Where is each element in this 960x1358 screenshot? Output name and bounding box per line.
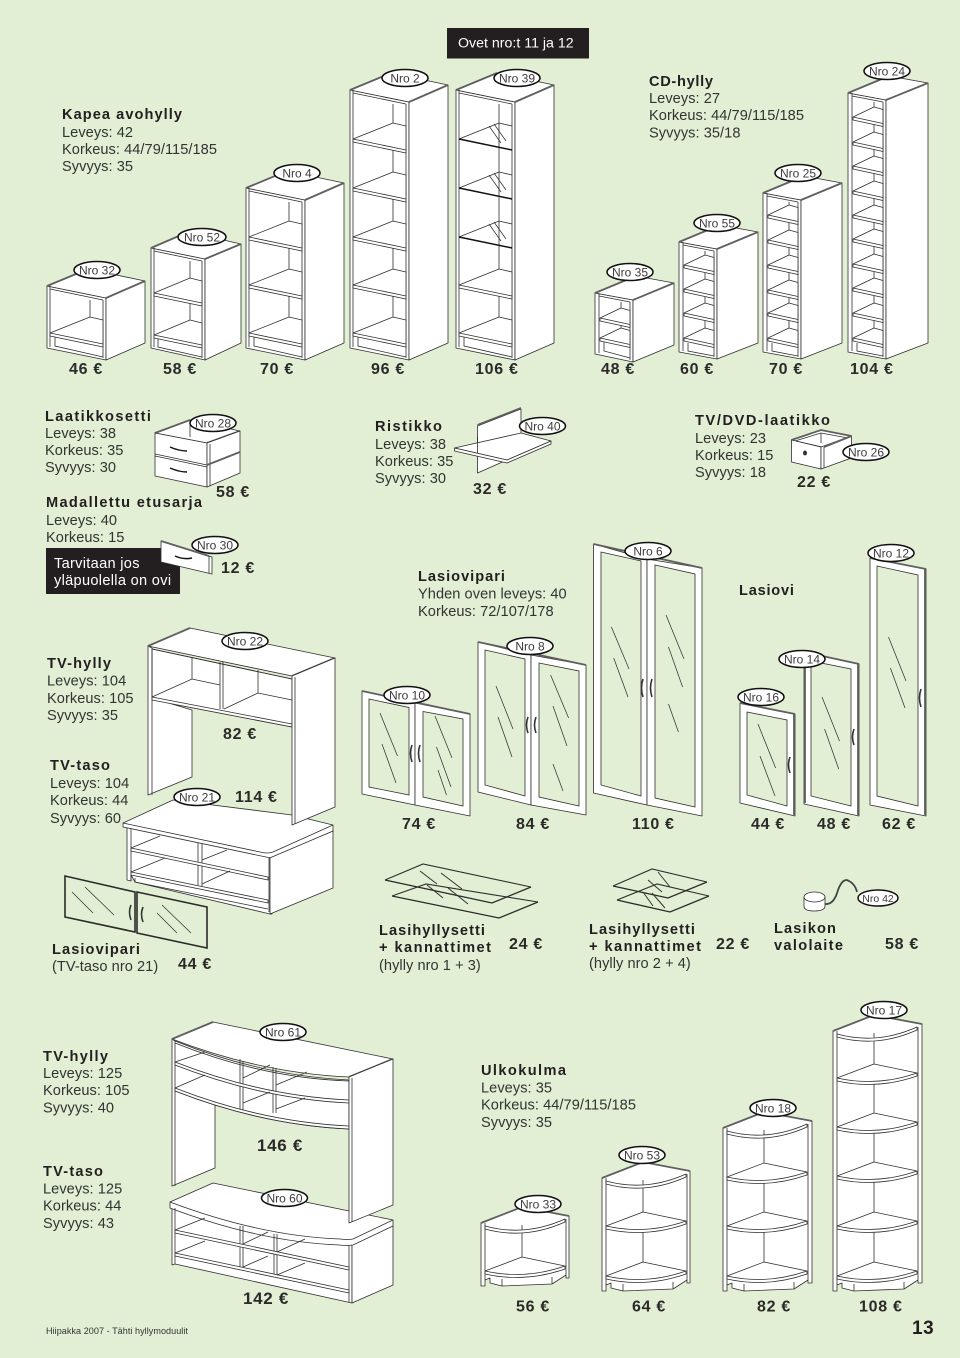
- labels: glass doors: Nro 10: [389, 688, 425, 702]
- text block: glass shelf set 1 + 3: (hylly nro 1 + 3): [379, 958, 481, 974]
- callout: glass doors note: [447, 28, 589, 58]
- glass door pair: Nro 6: [594, 544, 702, 816]
- corner shelf: Nro 18: [723, 1112, 812, 1291]
- prices: corner shelves: 56 €: [516, 1298, 550, 1316]
- labels and prices: TV set 125: Nro 61: [265, 1026, 301, 1040]
- text block: TV-hylly 104: Syvyys: 35: [47, 708, 118, 724]
- text block: glass shelf set 2 + 4: Lasihyllysetti: [589, 922, 695, 938]
- text block: Kapea avohylly: Syvyys: 35: [62, 159, 133, 175]
- text block: Lasiovipari TV-taso: [52, 942, 158, 975]
- text block: glass shelf set 2 + 4: + kannattimet: [589, 939, 701, 955]
- text block: Ulkokulma: Leveys: 35: [481, 1080, 552, 1096]
- labels: top row numbers: Nro 39: [499, 72, 535, 86]
- icon: glass light fitting with cable: [804, 880, 857, 911]
- labels: drawers: Nro 28: [195, 416, 231, 430]
- TV stand: Nro 21: [123, 800, 333, 914]
- text block: Ulkokulma: Syvyys: 35: [481, 1115, 552, 1131]
- labels: glass doors: Nro 8: [515, 640, 545, 654]
- TV shelf: Nro 61: [172, 1022, 393, 1223]
- labels: corner shelves: Nro 18: [755, 1102, 791, 1116]
- labels: glass doors: Nro 14: [784, 652, 820, 666]
- text block: TV-taso 104: Leveys: 104: [50, 776, 129, 792]
- prices: top row: 70 €: [260, 361, 294, 378]
- shelf: Nro 4: [246, 171, 344, 360]
- labels: top row numbers: Nro 52: [184, 230, 220, 244]
- text block: glass shelf set 1 + 3: + kannattimet: [379, 940, 491, 956]
- text block: CD-hylly: CD-hylly: [649, 74, 714, 90]
- text block: Ulkokulma: [481, 1063, 636, 1131]
- text block: TV/DVD-laatikko: Syvyys: 18: [695, 465, 766, 481]
- text block: Ulkokulma: Korkeus: 44/79/115/185: [481, 1098, 636, 1114]
- text block: CD-hylly: [649, 74, 804, 142]
- prices: top row: [69, 361, 894, 378]
- text block: TV-hylly 125: [43, 1049, 130, 1116]
- labels: top row numbers: Nro 4: [282, 166, 312, 180]
- text block: TV-taso 125: Leveys: 125: [43, 1182, 122, 1198]
- text block: Madallettu etusarja: Korkeus: 15: [46, 530, 124, 546]
- text block: TV-hylly 125: Syvyys: 40: [43, 1100, 114, 1116]
- text block: Madallettu etusarja: Leveys: 40: [46, 513, 117, 529]
- text block: CD-hylly: Syvyys: 35/18: [649, 126, 740, 142]
- text block: Kapea avohylly: Kapea avohylly: [62, 107, 183, 123]
- text block: TV-hylly 104: Leveys: 104: [47, 674, 126, 690]
- prices: top row: 48 €: [601, 361, 635, 378]
- labels: top row numbers: Nro 2: [390, 72, 420, 86]
- drawer: Nro 26: Nro 26: [848, 446, 884, 460]
- callout: needed if door above: [46, 548, 180, 594]
- prices: corner shelves: 64 €: [632, 1298, 666, 1316]
- grid divider: Nro 40: [454, 408, 566, 473]
- prices: corner shelves: [516, 1298, 903, 1316]
- text block: Lasiovi: Lasiovi: [739, 583, 794, 599]
- text block: Laatikkosetti: [45, 409, 151, 476]
- text block: TV-hylly 104: [47, 656, 134, 724]
- text block: glass shelf set 1 + 3: [379, 923, 491, 974]
- prices: glass doors: 74 €: [402, 816, 436, 833]
- prices: glass doors: [402, 816, 916, 833]
- prices: glass doors: 84 €: [516, 816, 550, 833]
- callout: needed if door above: yläpuolella on ovi: [54, 573, 171, 589]
- text block: Laatikkosetti: Syvyys: 30: [45, 460, 116, 476]
- text block: TV/DVD-laatikko: [695, 413, 830, 481]
- text block: Madallettu etusarja: Madallettu etusarja: [46, 495, 203, 511]
- shelf: Nro 25: [763, 176, 842, 359]
- text block: Lasiovipari: Lasiovipari: [418, 569, 505, 585]
- text block: TV-hylly 125: Korkeus: 105: [43, 1083, 130, 1099]
- text block: CD-hylly: Korkeus: 44/79/115/185: [649, 108, 804, 124]
- labels and prices: TV set 125: 142 €: [243, 1289, 289, 1308]
- page number: 13: [912, 1318, 934, 1339]
- label: Nro 42: Nro 42: [862, 893, 894, 905]
- labels and prices: TV set 125: 146 €: [257, 1136, 303, 1155]
- text block: Lasiovipari: Yhden oven leveys: 40: [418, 586, 567, 602]
- callout: needed if door above: Tarvitaan jos: [54, 556, 140, 572]
- labels and prices: TV set 104: [174, 632, 278, 806]
- labels: drawers: Nro 30: [197, 538, 233, 552]
- price: glass shelf set 2 + 4: 22 €: [716, 936, 750, 953]
- price: Ristikko: 32 €: [473, 481, 507, 498]
- shelf: Nro 2: [350, 73, 448, 360]
- text block: TV-taso 104: Syvyys: 60: [50, 811, 121, 827]
- glass door pair: Nro 8: [478, 642, 586, 815]
- labels: drawers: [190, 414, 238, 554]
- labels: top row numbers: Nro 25: [780, 166, 816, 180]
- text block: Lasiovipari TV-taso: Lasiovipari: [52, 942, 140, 958]
- TV shelf: Nro 22: [148, 628, 335, 825]
- prices: glass doors: 48 €: [817, 816, 851, 833]
- shelf: Nro 24: [848, 76, 928, 359]
- drawer: Nro 26: [792, 430, 889, 469]
- prices: top row: 106 €: [475, 361, 519, 378]
- labels: glass doors: Nro 12: [873, 546, 909, 560]
- text block: Lasikon valolaite: [774, 921, 843, 954]
- text block: TV/DVD-laatikko: TV/DVD-laatikko: [695, 413, 830, 429]
- prices: glass doors: 44 €: [751, 816, 785, 833]
- labels and prices: TV set 104: 82 €: [223, 726, 257, 743]
- labels: glass doors: [384, 542, 914, 706]
- text block: Lasiovipari: [418, 569, 567, 620]
- labels: corner shelves: Nro 53: [624, 1148, 660, 1162]
- text block: Kapea avohylly: [62, 107, 217, 175]
- text block: Ristikko: [375, 419, 453, 487]
- prices: drawers: 58 €: [216, 484, 250, 501]
- labels: top row numbers: Nro 35: [612, 266, 648, 280]
- footer credit: Hiipakka 2007 - Tähti hyllymoduulit: [46, 1326, 188, 1337]
- text block: Lasiovipari: Korkeus: 72/107/178: [418, 604, 554, 620]
- prices: corner shelves: 82 €: [757, 1298, 791, 1316]
- prices: glass doors: 62 €: [882, 816, 916, 833]
- price: TV/DVD-laatikko: 22 €: [797, 474, 831, 491]
- text block: TV-taso 104: TV-taso: [50, 758, 110, 774]
- labels: top row numbers: Nro 32: [79, 264, 115, 278]
- labels and prices: TV set 125: Nro 60: [266, 1192, 303, 1206]
- text block: TV-hylly 104: Korkeus: 105: [47, 691, 134, 707]
- text block: TV/DVD-laatikko: Korkeus: 15: [695, 448, 773, 464]
- text block: Ristikko: Leveys: 38: [375, 437, 446, 453]
- shelf: Nro 32: [47, 269, 145, 360]
- labels: glass doors: Nro 16: [743, 690, 779, 704]
- text block: TV-hylly 125: TV-hylly: [43, 1049, 109, 1065]
- drawer front: Nro 30: [161, 541, 212, 574]
- text block: Ristikko: Korkeus: 35: [375, 454, 453, 470]
- text block: TV-taso 125: Syvyys: 43: [43, 1216, 114, 1232]
- text block: TV/DVD-laatikko: Leveys: 23: [695, 431, 766, 447]
- TV stand: Nro 60: [170, 1183, 393, 1303]
- price: TV glass doors: 44 €: [178, 956, 212, 973]
- prices: top row: 96 €: [371, 361, 405, 378]
- glass door: Nro 12: [870, 558, 926, 816]
- prices: top row: 70 €: [769, 361, 803, 378]
- glass door pair: TV stand: [65, 876, 207, 948]
- text block: TV-taso 125: TV-taso: [43, 1164, 103, 1180]
- prices: drawers: [216, 484, 255, 577]
- text block: Lasikon valolaite: valolaite: [774, 938, 843, 954]
- price: glass shelf set 1 + 3: 24 €: [509, 936, 543, 953]
- labels and prices: TV set 104: Nro 21: [179, 790, 215, 804]
- price: valolaite: 58 €: [885, 936, 919, 953]
- prices: top row: 46 €: [69, 361, 103, 378]
- text block: TV-taso 104: [50, 758, 129, 827]
- text block: Lasiovipari TV-taso: (TV-taso nro 21): [52, 959, 158, 975]
- text block: Madallettu etusarja: [46, 495, 203, 546]
- prices: corner shelves: 108 €: [859, 1298, 903, 1316]
- prices: top row: 104 €: [850, 361, 894, 378]
- glass shelf set 1 + 3: [385, 864, 538, 918]
- prices: top row: 58 €: [163, 361, 197, 378]
- shelf: Nro 55: [679, 225, 758, 359]
- corner shelf: Nro 53: [602, 1162, 690, 1291]
- text block: CD-hylly: Leveys: 27: [649, 91, 720, 107]
- prices: drawers: 12 €: [221, 560, 255, 577]
- labels and prices: TV set 104: 114 €: [235, 789, 278, 806]
- shelf: Nro 35: [595, 276, 674, 362]
- text block: Laatikkosetti: Korkeus: 35: [45, 443, 123, 459]
- labels: corner shelves: [515, 1002, 907, 1212]
- corner shelf: Nro 17: [833, 1015, 922, 1291]
- text block: Kapea avohylly: Korkeus: 44/79/115/185: [62, 142, 217, 158]
- text block: Lasikon valolaite: Lasikon: [774, 921, 836, 937]
- labels: glass doors: Nro 6: [633, 544, 663, 558]
- text block: glass shelf set 1 + 3: Lasihyllysetti: [379, 923, 485, 939]
- label: Nro 42: [858, 890, 898, 906]
- labels: corner shelves: Nro 33: [520, 1198, 556, 1212]
- text block: glass shelf set 2 + 4: [589, 922, 701, 972]
- corner shelf: Nro 33: [481, 1207, 569, 1286]
- labels and prices: TV set 104: Nro 22: [227, 634, 263, 648]
- glass door: Nro 14: [804, 652, 859, 816]
- labels: top row numbers: [74, 62, 910, 280]
- text block: Laatikkosetti: Leveys: 38: [45, 426, 116, 442]
- labels and prices: TV set 125: [243, 1024, 308, 1308]
- glass shelf set 2 + 4: [613, 869, 709, 912]
- drawer set: Nro 28: [155, 420, 240, 487]
- text block: TV-hylly 104: TV-hylly: [47, 656, 112, 672]
- glass door: Nro 16: [740, 703, 795, 816]
- text block: TV-taso 125: Korkeus: 44: [43, 1198, 121, 1214]
- shelf: Nro 52: [151, 232, 241, 360]
- text block: TV-hylly 125: Leveys: 125: [43, 1066, 122, 1082]
- callout: glass doors note: Ovet nro:t 11 ja 12: [458, 36, 574, 52]
- prices: glass doors: 110 €: [632, 816, 675, 833]
- grid divider: Nro 40: Nro 40: [524, 420, 561, 434]
- text block: Ulkokulma: Ulkokulma: [481, 1063, 567, 1079]
- labels: top row numbers: Nro 55: [699, 216, 735, 230]
- labels: corner shelves: Nro 17: [866, 1004, 902, 1018]
- prices: top row: 60 €: [680, 361, 714, 378]
- shelf: Nro 39 with glass shelves: [456, 73, 554, 360]
- labels: top row numbers: Nro 24: [869, 64, 905, 78]
- text block: TV-taso 125: [43, 1164, 122, 1232]
- text block: glass shelf set 2 + 4: (hylly nro 2 + 4): [589, 956, 691, 972]
- glass door pair: Nro 10: [362, 691, 470, 816]
- text block: Kapea avohylly: Leveys: 42: [62, 125, 133, 141]
- text block: Ristikko: Syvyys: 30: [375, 471, 446, 487]
- text block: Laatikkosetti: Laatikkosetti: [45, 409, 151, 425]
- text block: Ristikko: Ristikko: [375, 419, 442, 435]
- text block: TV-taso 104: Korkeus: 44: [50, 793, 128, 809]
